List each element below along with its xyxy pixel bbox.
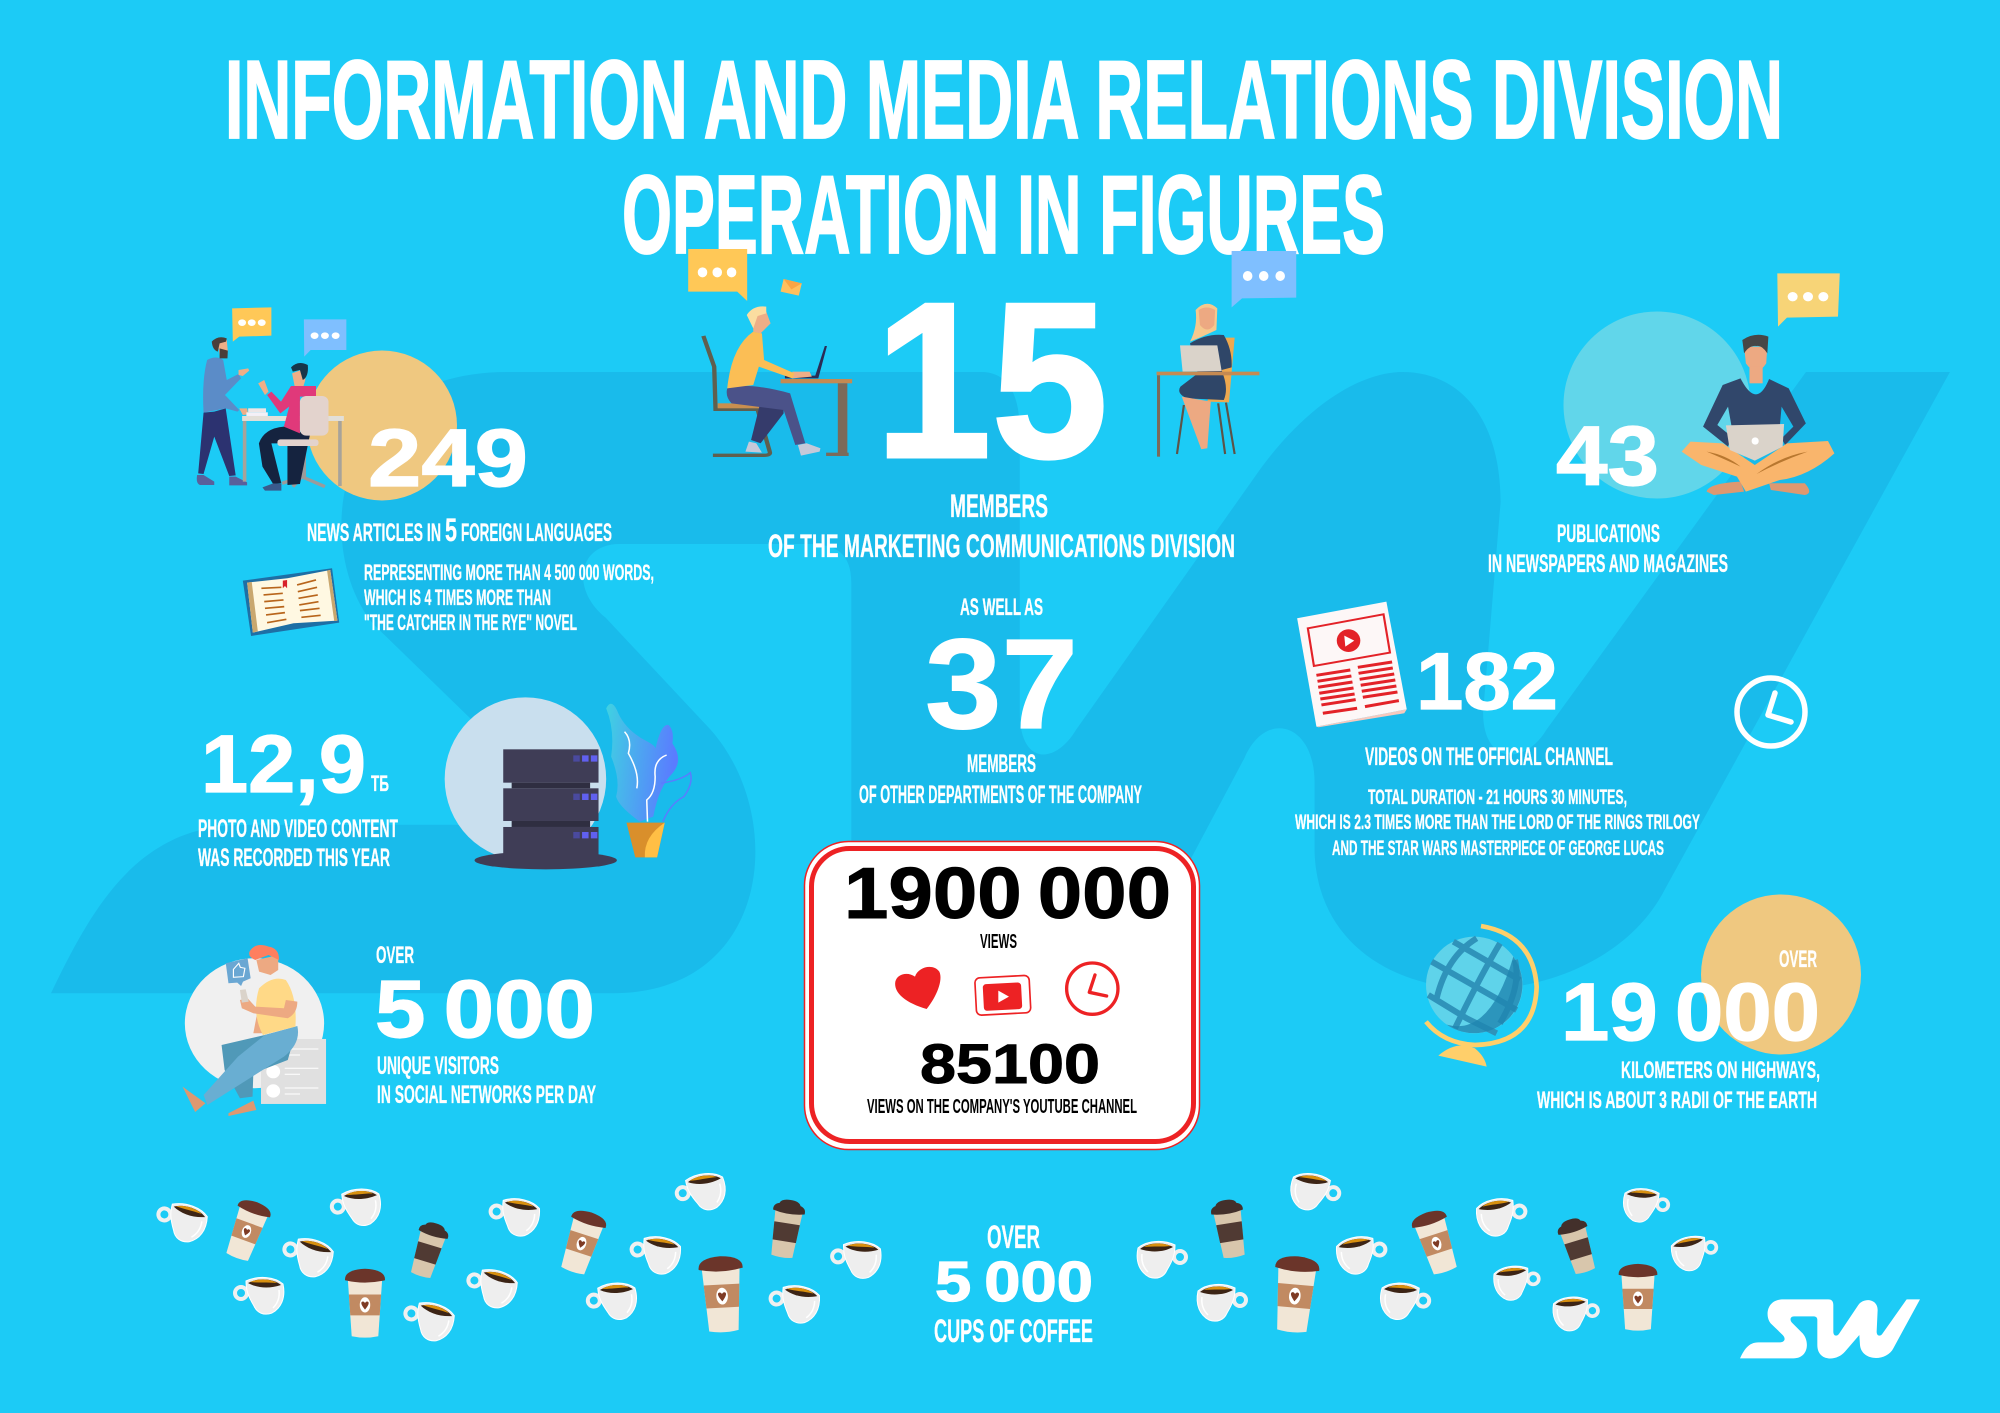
caption: videos on the channel: VIDEOS ON THE OFFICIAL CHANNEL [1365,743,1613,771]
panel: recorded content [198,697,691,872]
caption: marketing communications members: MEMBERS [950,488,1048,524]
panel: coffee cups left [153,1170,882,1345]
label: over: OVER [376,942,414,969]
caption: publications: PUBLICATIONS [1557,520,1660,548]
caption: news articles: 5 [445,512,457,548]
caption: visitors [377,1052,596,1109]
label: as well as: AS WELL AS [960,594,1043,621]
description: total duration: TOTAL DURATION - 21 HOURS 30 MINUTES, [1368,786,1627,809]
caption: photo and video: WAS RECORDED THIS YEAR [198,844,390,872]
caption: visitors: IN SOCIAL NETWORKS PER DAY [377,1081,596,1109]
caption: news articles [307,512,612,548]
caption: highways [1537,1057,1820,1114]
panel: kilometers [1426,894,1861,1114]
panel: videos [1295,602,1805,860]
panel: 15 members [688,249,1296,564]
illustration: person with phone [183,945,326,1116]
icon: clock [1737,678,1805,746]
circle behind 43 [1564,312,1750,498]
panel: coffee caption: OVER [987,1219,1040,1255]
number 15: 15 [875,257,1108,505]
caption: news articles: FOREIGN LANGUAGES [461,519,612,547]
number 19000: 19 000 [1561,967,1820,1058]
number 249: 249 [368,413,528,504]
watermark: large SW logo [51,372,1950,995]
caption: youtube views: VIEWS ON THE COMPANY'S YOUTUBE CHANNEL [867,1096,1137,1118]
panel: 37 members [859,594,1142,809]
panel: coffee caption [934,1219,1093,1349]
caption: other departments [859,750,1142,809]
caption: marketing communications members [768,488,1235,564]
number 182: 182 [1416,637,1558,727]
illustration: man with laptop [1682,273,1840,495]
caption: highways: KILOMETERS ON HIGHWAYS, [1621,1057,1820,1084]
icon: globe [1426,926,1537,1067]
title [225,38,1783,277]
panel: unique visitors [183,942,596,1116]
number 12,9: 12,9 [201,719,366,810]
illustration: woman at laptop [1157,251,1296,457]
caption: visitors: UNIQUE VISITORS [377,1052,499,1080]
number 43: 43 [1556,409,1659,503]
number 5000: 5 000 [375,964,595,1055]
illustration: server rack with plant [445,697,691,869]
caption: photo and video: PHOTO AND VIDEO CONTENT [198,815,398,843]
card frame [804,842,1200,1150]
title: OPERATION IN FIGURES [622,153,1385,277]
illustration: two people at a desk [197,307,346,491]
number 37: 37 [925,613,1078,756]
description: total duration: AND THE STAR WARS MASTERPIECE OF GEORGE LUCAS [1332,837,1664,860]
caption: news articles: NEWS ARTICLES IN [307,519,441,547]
illustration: man at laptop [688,249,852,456]
description: total duration [1295,786,1700,860]
caption: publications: IN NEWSPAPERS AND MAGAZINES [1488,550,1728,578]
circle behind 19000 [1701,894,1861,1054]
description: word count: WHICH IS 4 TIMES MORE THAN [364,585,551,610]
panel: coffee caption: 5 000 [935,1250,1093,1314]
description: word count: REPRESENTING MORE THAN 4 500 000 WORDS, [364,560,654,585]
caption: other departments: MEMBERS [967,750,1036,778]
caption: publications [1488,520,1728,578]
label: views: VIEWS [980,931,1017,953]
logo: SW [1740,1299,1920,1358]
panel: coffee caption: CUPS OF COFFEE [934,1313,1093,1349]
icons: heart, video, clock [895,963,1118,1015]
icon: newspaper with play button [1297,602,1407,727]
description: word count [364,560,654,635]
number 1900000: 1900 000 [844,854,1171,934]
panel: views card [804,842,1200,1150]
panel: news articles [197,307,654,636]
panel: coffee cups right [1137,1170,1720,1334]
label: over: OVER [1779,946,1817,973]
panel: publications [1488,273,1840,578]
circle behind 249 [307,350,457,500]
description: word count: "THE CATCHER IN THE RYE" NOVEL [364,610,577,635]
icon: open book [243,568,339,636]
caption: photo and video [198,815,398,872]
description: total duration: WHICH IS 2.3 TIMES MORE THAN THE LORD OF THE RINGS TRILOGY [1295,811,1700,834]
caption: marketing communications members: OF THE MARKETING COMMUNICATIONS DIVISION [768,528,1235,564]
caption: other departments: OF OTHER DEPARTMENTS OF THE COMPANY [859,781,1142,809]
unit: ТБ [371,771,389,796]
number 85100: 85100 [920,1032,1100,1095]
